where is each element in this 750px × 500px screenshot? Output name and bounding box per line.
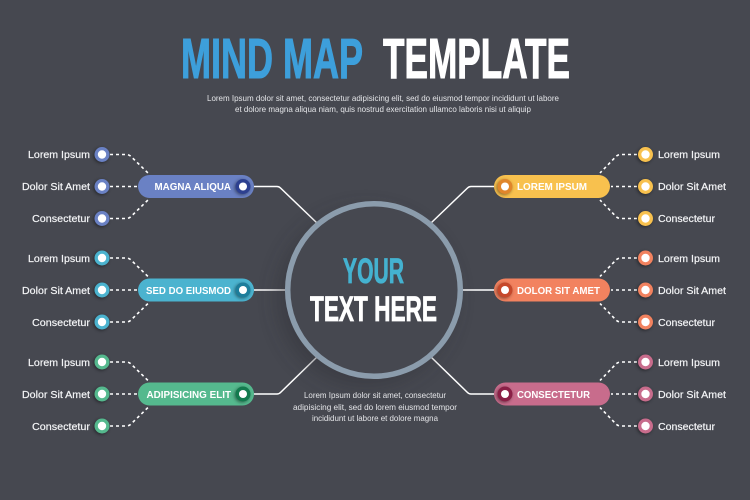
items: Consectetur [32, 421, 91, 433]
items [22, 250, 110, 330]
items [638, 147, 726, 226]
central heading: TEXT HERE [310, 290, 437, 329]
items: Dolor Sit Amet [658, 285, 726, 297]
pill: ADIPISICING ELIT [146, 390, 231, 401]
pill [138, 278, 254, 302]
items: Dolor Sit Amet [22, 285, 90, 297]
central circle [278, 204, 460, 386]
subtitle text: et dolore magna aliqua niam, quis nostrud exercitation ullamco laboris nisi ut aliquip [235, 104, 531, 114]
subtitle text: Lorem Ipsum dolor sit amet, consectetur adipisicing elit, sed do eiusmod tempor incididunt ut labore [207, 93, 559, 103]
central heading [310, 252, 437, 329]
pill [494, 175, 610, 198]
items [638, 250, 726, 330]
items: Lorem Ipsum [28, 253, 90, 265]
bottom description text [293, 390, 457, 423]
branch: Magna Aliqua [22, 147, 254, 226]
items: Consectetur [32, 317, 91, 329]
items: Consectetur [658, 213, 715, 225]
items: Dolor Sit Amet [658, 389, 726, 401]
bottom description text: adipisicing elit, sed do lorem eiusmod tempor [293, 402, 457, 412]
branch: Dolor Sit Amet [494, 250, 726, 330]
pill [494, 278, 610, 302]
items: Lorem Ipsum [28, 149, 90, 161]
pill: LOREM IPSUM [517, 182, 587, 193]
items [638, 354, 726, 434]
pill: SED DO EIUSMOD [146, 286, 231, 297]
items [22, 354, 110, 434]
items: Lorem Ipsum [658, 253, 720, 265]
items: Lorem Ipsum [658, 357, 720, 369]
subtitle text [207, 93, 559, 114]
pill: DOLOR SIT AMET [517, 286, 600, 297]
pill: MAGNA ALIQUA [154, 182, 231, 193]
items: Consectetur [658, 421, 715, 433]
items: Consectetur [658, 317, 715, 329]
pill: CONSECTETUR [517, 390, 591, 401]
pill [138, 175, 254, 198]
items: Lorem Ipsum [658, 149, 720, 161]
bottom description text: Lorem Ipsum dolor sit amet, consectetur [304, 390, 446, 400]
items: Dolor Sit Amet [22, 181, 90, 193]
branch: Sed Do Eiusmod [22, 250, 254, 330]
items: Consectetur [32, 213, 91, 225]
connectors to central circle [254, 186, 494, 394]
items: Lorem Ipsum [28, 357, 90, 369]
branch: Lorem Ipsum [494, 147, 726, 226]
central heading: YOUR [343, 252, 404, 291]
pill [138, 382, 254, 406]
title: MIND MAP [181, 27, 363, 91]
title: TEMPLATE [383, 27, 570, 91]
items: Dolor Sit Amet [22, 389, 90, 401]
items [22, 147, 110, 226]
items: Dolor Sit Amet [658, 181, 726, 193]
pill [494, 382, 610, 406]
branch: Adipisicing Elit [22, 354, 254, 434]
branch: Consectetur [494, 354, 726, 434]
bottom description text: incididunt ut labore et dolore magna [312, 413, 438, 423]
